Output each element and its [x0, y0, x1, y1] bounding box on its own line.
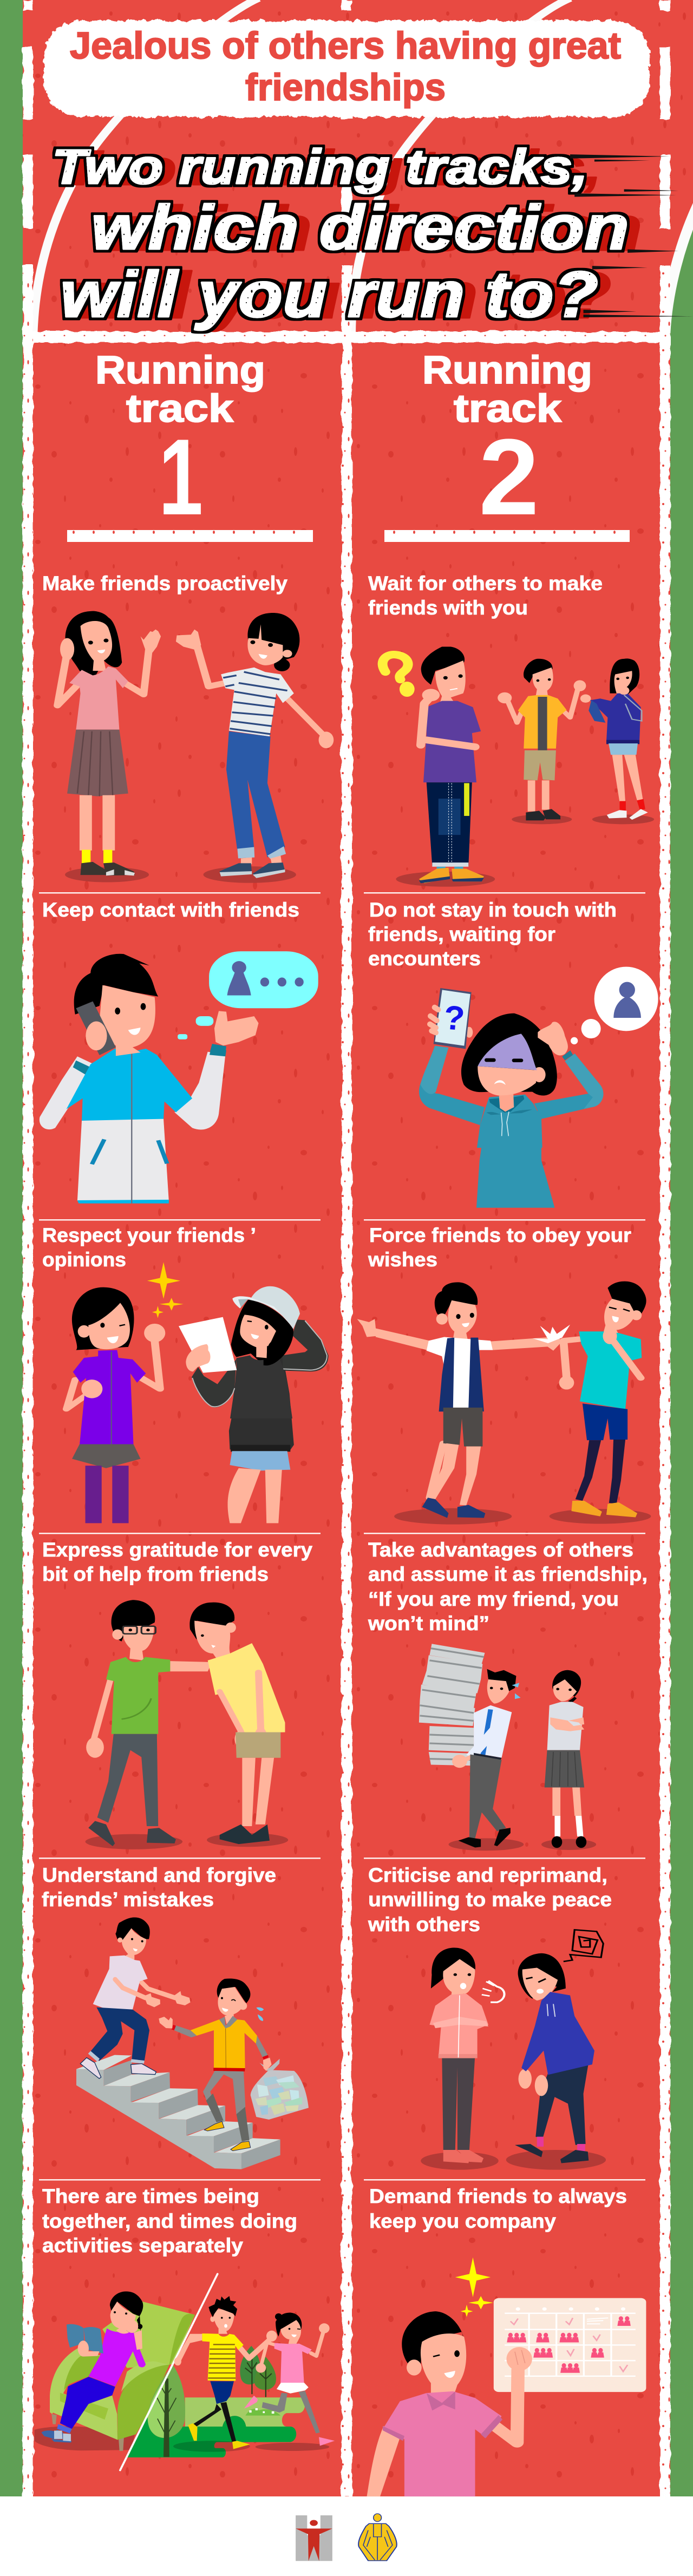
panel: keep contact with friends: [40, 899, 318, 1204]
text: do not stay in touch: friends, waiting for: [368, 923, 555, 945]
text: express gratitude: [42, 1539, 312, 1585]
panel: criticise and reprimand: [368, 1864, 612, 2170]
text: understand and forgive: Understand and forgive: [42, 1864, 276, 1886]
text: make friends proactively: Make friends proactively: [42, 572, 287, 594]
illustration: worried girl looking at phone: [419, 967, 658, 1208]
panel: express gratitude: [42, 1539, 312, 1849]
text: do not stay in touch: encounters: [368, 947, 481, 970]
text: understand and forgive: friends’ mistakes: [42, 1888, 214, 1911]
number 1: 1: [159, 417, 203, 538]
illustration: two friends greeting: [57, 611, 334, 883]
heading speed lines: [570, 154, 693, 317]
text: respect your friends' opinions: Respect your friends ’: [42, 1224, 256, 1246]
panel: running track 2 header: [384, 349, 630, 542]
panel: force friends to obey: [357, 1224, 651, 1525]
illustration: boy carrying a stack of books: [419, 1644, 596, 1851]
text: respect your friends' opinions: opinions: [42, 1248, 126, 1271]
text: express gratitude: bit of help from friends: [42, 1563, 269, 1585]
text: take advantage of others: and assume it as friendship,: [368, 1563, 648, 1585]
panel: do not stay in touch: [368, 899, 658, 1208]
text: times together and separately: together, and times doing: [42, 2210, 297, 2232]
text: take advantage of others: Take advantages of others: [368, 1539, 633, 1561]
curved lane lines at the top: [33, 0, 693, 333]
title banner: Jealous of others having great: [70, 24, 621, 67]
right grass strip: [670, 225, 693, 2496]
main heading: which direction: [91, 192, 629, 263]
text: understand and forgive: [42, 1864, 276, 1911]
underline bar: [67, 530, 313, 542]
panel: take advantage of others: [368, 1539, 648, 1851]
panel: running track 1 header: [67, 349, 313, 542]
heading: running track 2: track: [454, 387, 562, 430]
text: times together and separately: There are times being: [42, 2185, 259, 2207]
text: take advantage of others: “If you are my friend, you: [368, 1588, 619, 1610]
row dividers: [39, 892, 645, 2181]
text: times together and separately: [42, 2185, 297, 2257]
panel: times together and separately: [35, 2185, 335, 2470]
illustration: reading alone and running together: [35, 2274, 335, 2470]
illustration: worried girl looking at phone: ?: [442, 998, 466, 1038]
text: keep contact with friends: Keep contact with friends: [42, 899, 299, 921]
panel: make friends proactively: [42, 572, 334, 883]
text: force friends to obey: Force friends to obey your: [369, 1224, 631, 1246]
text: criticise and reprimand: [368, 1864, 612, 1936]
text: take advantage of others: won’t mind”: [368, 1612, 489, 1634]
panel: respect your friends' opinions: [42, 1224, 329, 1523]
illustration: boy pointing at busy calendar: [367, 2258, 646, 2496]
illustration: friends on a staircase with a rubbish bag: [76, 1917, 309, 2169]
number 2: 2: [479, 417, 539, 538]
text: demand company: Demand friends to always: [369, 2185, 627, 2207]
heading: running track 2: [422, 349, 592, 430]
illustration: boy on the phone with speech bubble: [40, 951, 318, 1204]
panel: wait for others: [368, 572, 654, 887]
logo: golden hands emblem: [358, 2514, 397, 2561]
illustration: girl in purple and girl reading paper: [66, 1262, 329, 1523]
text: force friends to obey: wishes: [368, 1248, 437, 1271]
main heading: [52, 140, 629, 331]
text: criticise and reprimand: Criticise and reprimand,: [368, 1864, 607, 1886]
text: criticise and reprimand: unwilling to make peace: [368, 1888, 612, 1911]
illustration: boy comforting friend: [86, 1600, 288, 1849]
heading: running track 1: [95, 349, 265, 430]
logo: social welfare department: [296, 2515, 332, 2561]
illustration: two friends arguing: [421, 1930, 606, 2170]
text: express gratitude: Express gratitude for every: [42, 1539, 312, 1561]
main heading: Two running tracks,: [52, 140, 588, 194]
heading: running track 1: Running: [95, 349, 265, 392]
text: demand company: [369, 2185, 627, 2232]
text: demand company: keep you company: [369, 2210, 556, 2232]
text: wait for others to make friends: [368, 572, 603, 619]
text: wait for others to make friends: Wait for others to make: [368, 572, 603, 594]
illustration: boy watching two friends chat: [383, 647, 654, 887]
text: times together and separately: activities separately: [42, 2234, 243, 2257]
text: do not stay in touch: Do not stay in touch with: [369, 899, 617, 921]
title banner: friendships: [245, 66, 446, 108]
text: take advantage of others: [368, 1539, 648, 1634]
left grass strip: [0, 0, 23, 2496]
heading: running track 2: Running: [422, 349, 592, 392]
text: wait for others to make friends: friends with you: [368, 597, 528, 619]
main heading: will you run to?: [60, 258, 598, 331]
text: do not stay in touch: [368, 899, 617, 970]
text: criticise and reprimand: with others: [368, 1913, 480, 1936]
underline bar: [384, 530, 630, 542]
panel: understand and forgive: [42, 1864, 309, 2169]
panel: demand company: [367, 2185, 646, 2496]
heading: running track 1: track: [126, 387, 234, 430]
text: respect your friends' opinions: [42, 1224, 256, 1271]
illustration: boy pushing another boy: [357, 1282, 651, 1525]
text: force friends to obey: [368, 1224, 631, 1271]
title banner: [44, 21, 650, 117]
